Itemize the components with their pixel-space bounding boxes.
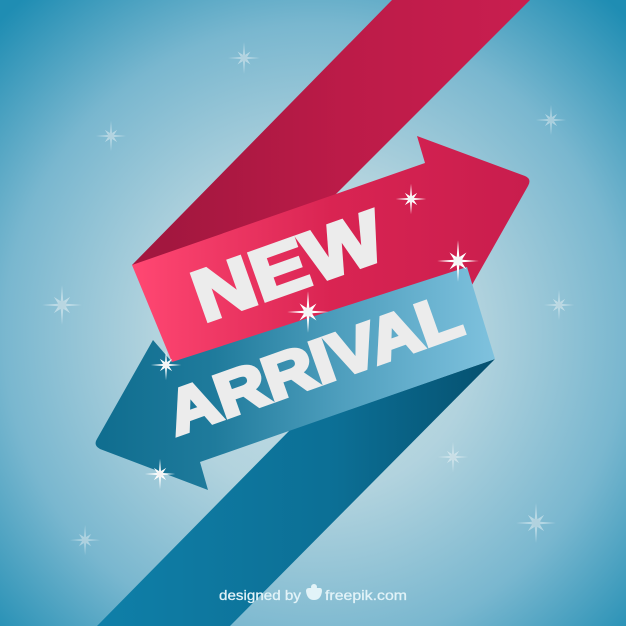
sparkle lower left [70,525,100,555]
sparkle upper right [536,105,566,135]
red arrow ribbon [132,136,529,362]
heading: New: NEW [182,195,394,337]
sparkle top [228,42,260,74]
freepik credit [219,584,407,603]
credit text right: freepik.com [325,587,407,603]
heading: Arrival: ARRIVAL [158,281,471,449]
sparkle at ribbon left [151,350,181,380]
foreground sparkles [145,184,479,489]
sparkle left [42,285,82,325]
background sparkles [42,42,574,555]
credit text left: designed by [219,587,301,603]
sparkle right [544,290,574,320]
sparkle at ribbon center [287,291,329,333]
sparkle lower center [438,442,468,472]
sparkle on red arrow [396,184,426,214]
sparkle at ribbon edge right [437,240,479,282]
blue arrow ribbon [96,267,495,490]
blue ribbon tail [97,359,495,626]
sparkle upper left [96,121,126,151]
red ribbon tail [132,0,530,300]
sparkle lower right [516,503,556,543]
sparkle at blue arrow [145,459,175,489]
icon: freepik mascot [306,584,322,600]
